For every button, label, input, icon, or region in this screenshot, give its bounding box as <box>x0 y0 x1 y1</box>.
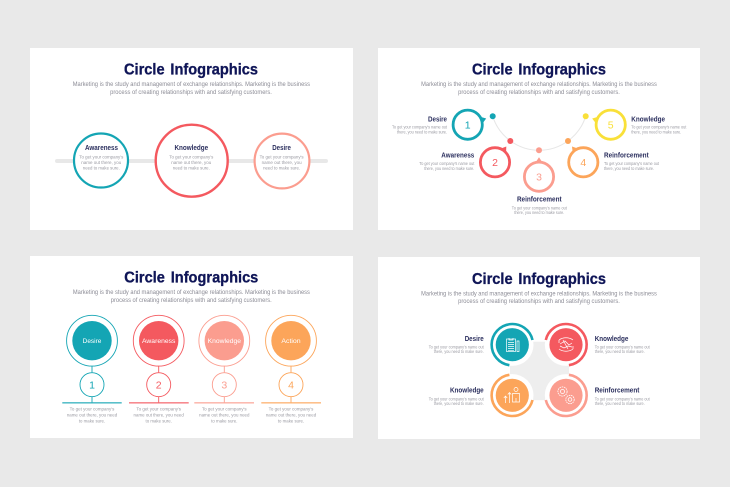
arc dots <box>490 113 589 153</box>
label: reinforcement right: there, you need to make sure. <box>604 166 654 172</box>
ring 5 <box>592 110 625 139</box>
column: desire: To get your company's <box>70 407 115 413</box>
circle: desire: Desire <box>272 145 291 152</box>
label: awareness: there, you need to make sure. <box>424 166 474 172</box>
label: awareness: To get your company's name out <box>419 161 475 167</box>
column: knowledge: To get your company's <box>202 407 247 413</box>
circle: desire <box>255 134 309 188</box>
label: reinforcement <box>595 388 650 407</box>
label: knowledge: there, you need to make sure. <box>631 129 681 135</box>
label: desire: Desire <box>465 336 484 343</box>
column: action <box>261 315 321 425</box>
column: awareness <box>129 315 189 425</box>
label: knowledge: Knowledge <box>631 117 665 124</box>
circle: awareness: name out there, you <box>81 160 122 166</box>
label: knowledge <box>631 117 687 135</box>
circle top-left with clipboard icon <box>491 324 534 366</box>
column: action: name out there, you need <box>266 413 316 419</box>
circle bottom-left with person icon <box>491 374 534 416</box>
subtitle: process of creating relationships with and satisfying customers. <box>111 297 272 304</box>
column: desire: to make sure. <box>79 419 105 425</box>
label: reinforcement: Reinforcement <box>595 388 640 395</box>
circle: knowledge <box>156 125 228 197</box>
label: desire: Desire <box>428 117 447 124</box>
subtitle: Marketing is the study and management of exchange relationships. Marketing is the business <box>421 290 657 298</box>
column: desire: Desire <box>83 338 102 345</box>
label: knowledge right: Knowledge <box>595 336 628 343</box>
column: action: to make sure. <box>278 419 304 425</box>
label: knowledge left: there, you need to make sure. <box>434 401 484 407</box>
label: knowledge: To get your company's name out <box>631 125 687 131</box>
label: reinforcement center <box>512 197 567 216</box>
column: knowledge: 3 <box>221 379 227 391</box>
circle: desire: need to make sure. <box>263 166 300 172</box>
column: knowledge: Knowledge <box>208 338 241 345</box>
column: awareness: name out there, you need <box>134 413 184 419</box>
column: knowledge: name out there, you need <box>199 413 250 419</box>
ring 4 <box>569 146 598 177</box>
ring 5: 5 <box>608 119 614 131</box>
label: desire: To get your company's name out <box>392 125 448 131</box>
subtitle: process of creating relationships with and satisfying customers. <box>458 298 620 305</box>
column: knowledge: to make sure. <box>211 419 237 425</box>
arc connector <box>493 116 586 150</box>
title: Circle Infographics <box>124 62 258 79</box>
icon: clipboard <box>506 338 519 352</box>
label: knowledge right: To get your company's name out <box>595 344 650 350</box>
label: knowledge right: there, you need to make sure. <box>595 349 645 355</box>
label: awareness <box>419 152 475 172</box>
subtitle: Marketing is the study and management of exchange relationships. Marketing is the business <box>73 289 311 296</box>
connector bar <box>55 159 328 163</box>
label: awareness: Awareness <box>441 152 474 159</box>
column: awareness: Awareness <box>142 338 176 345</box>
icon: gears <box>558 387 574 404</box>
column: action: 4 <box>288 379 294 391</box>
label: knowledge right <box>595 336 650 355</box>
panel: four columns <box>30 256 353 438</box>
panel: horizontal circles <box>30 48 353 230</box>
center shape <box>510 342 569 400</box>
ring 3 <box>524 157 554 191</box>
subtitle <box>73 289 311 304</box>
subtitle: Marketing is the study and management of exchange relationships. Marketing is the business <box>73 81 311 88</box>
circle bottom-right with gears icon <box>545 374 587 416</box>
ring 4: 4 <box>580 157 586 169</box>
label: reinforcement center: Reinforcement <box>517 197 562 204</box>
column: awareness: To get your company's <box>136 407 182 413</box>
circle: knowledge: To get your company's <box>169 155 214 161</box>
circle: knowledge: need to make sure. <box>173 166 210 172</box>
subtitle <box>73 81 311 96</box>
circle: desire: To get your company's <box>260 155 304 161</box>
label: desire: To get your company's name out <box>429 344 484 350</box>
circle: knowledge: name out there, you <box>171 160 212 166</box>
column: knowledge <box>194 315 254 425</box>
subtitle <box>421 81 657 96</box>
label: desire: there, you need to make sure. <box>397 129 447 135</box>
title: Circle Infographics <box>124 269 258 286</box>
subtitle <box>421 290 657 305</box>
column: awareness: to make sure. <box>146 419 172 425</box>
circle top-right with handshake icon <box>545 324 587 366</box>
label: reinforcement center: there, you need to make sure. <box>514 210 564 216</box>
column: desire <box>62 315 122 425</box>
title: Circle Infographics <box>472 271 606 288</box>
circle: awareness <box>74 134 128 188</box>
label: desire <box>429 336 484 355</box>
label: reinforcement: To get your company's name out <box>595 396 650 402</box>
label: knowledge left: Knowledge <box>450 388 484 395</box>
label: reinforcement right <box>604 152 660 172</box>
label: reinforcement right: Reinforcement <box>604 152 649 159</box>
column: desire: name out there, you need <box>67 413 117 419</box>
icon: person and arrows <box>504 388 520 403</box>
ring 2: 2 <box>492 157 498 169</box>
circle: awareness: Awareness <box>85 145 118 152</box>
circle: awareness: To get your company's <box>79 155 124 161</box>
ring 1 <box>453 110 486 139</box>
panel: arc of numbered circles <box>378 48 700 230</box>
icon: handshake <box>559 338 573 351</box>
label: reinforcement right: To get your company's name out <box>604 161 660 167</box>
title: Circle Infographics <box>472 62 606 79</box>
label: reinforcement center: To get your company's name out <box>512 205 567 211</box>
subtitle: Marketing is the study and management of exchange relationships. Marketing is the business <box>421 81 657 88</box>
subtitle: process of creating relationships with and satisfying customers. <box>110 89 272 96</box>
subtitle: process of creating relationships with and satisfying customers. <box>458 89 620 96</box>
ring 3: 3 <box>536 171 542 183</box>
label: knowledge left <box>429 388 484 407</box>
panel: quad circles with icons <box>378 257 700 439</box>
column: awareness: 2 <box>156 379 162 391</box>
label: desire: there, you need to make sure. <box>434 349 484 355</box>
column: action: To get your company's <box>269 407 314 413</box>
label: reinforcement: there, you need to make sure. <box>595 401 645 407</box>
column: action: Action <box>281 338 301 345</box>
circle: desire: name out there, you <box>262 160 302 166</box>
ring 2 <box>480 146 510 177</box>
column: desire: 1 <box>89 379 95 391</box>
circle: awareness: need to make sure. <box>83 166 120 172</box>
label: knowledge left: To get your company's name out <box>429 396 484 402</box>
label: desire <box>392 117 448 135</box>
ring 1: 1 <box>465 119 471 131</box>
circle: knowledge: Knowledge <box>174 145 208 152</box>
